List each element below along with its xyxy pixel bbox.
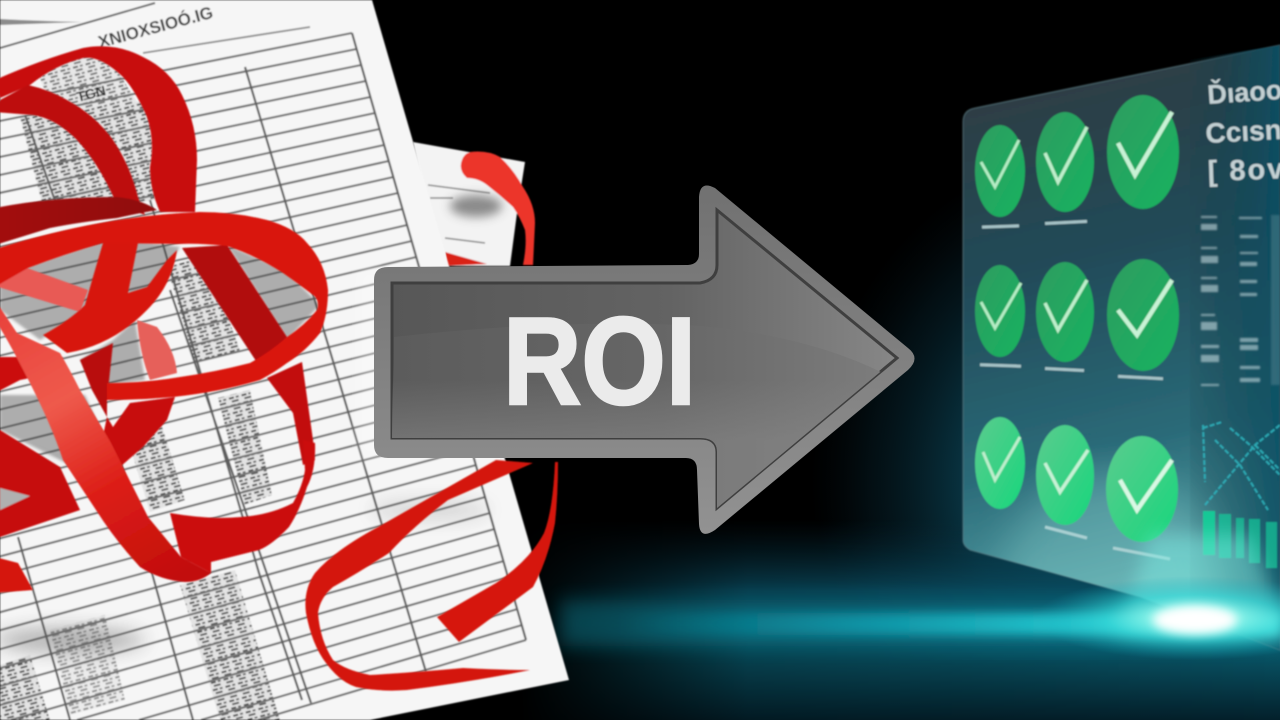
header text: XNIOXSIOÓ.IG [96,3,215,52]
back paper sheet [413,142,535,266]
pale centre band [137,320,177,380]
panel line chart [1203,422,1280,510]
light beam above the burst [1120,535,1280,630]
ROI label: ROI [503,293,696,431]
dense number columns [0,50,280,720]
paper shadow smudge [450,195,502,217]
front bright band [0,300,211,582]
lower left band [0,427,80,537]
top loop [0,46,197,212]
form label text: TGN [75,82,107,105]
floor light streak [560,535,1280,660]
red tape ribbon [0,46,558,691]
bottom left fragment [0,557,33,593]
header rule lines [143,27,310,53]
hanging ribbon tail [437,462,558,642]
table row lines [0,33,526,720]
top-left under sheet edges [0,19,82,25]
big loop [0,212,328,400]
right cross band [182,245,287,364]
check row 1 [975,95,1179,229]
panel right tint [1190,45,1280,650]
ROI arrow [360,185,914,534]
dark crossing band [0,197,157,245]
soft paper shadows [0,494,486,663]
light burst [1035,576,1280,660]
centre dark band [80,343,113,417]
check row 2 [975,259,1179,380]
grey shadow windows inside ribbon loops [0,241,320,480]
under loop band [100,397,175,473]
dashboard panel [963,45,1280,710]
back sheet ribbon fragment [445,252,487,266]
arrow bevel [374,185,914,534]
descending band [0,85,145,215]
lower left thin band [0,357,63,393]
lower right loop [170,440,315,573]
grey gap in lower left band [0,488,30,510]
table column lines [18,33,526,720]
background [545,232,1280,720]
check row 3 [975,417,1178,559]
main spreadsheet paper [0,0,569,720]
panel heading text [1205,74,1280,188]
back sheet ribbon [461,152,535,265]
mid band [43,243,177,353]
arrow gloss lower half [392,370,880,508]
panel glow rising from the light [994,460,1216,594]
panel bar chart [1203,511,1277,568]
panel small data columns [1201,215,1280,386]
long trailing ribbon [305,460,533,691]
pale left band [0,268,88,312]
arrow soft halo [360,268,380,458]
arrow inner face [392,210,897,508]
right loop descending band [267,362,315,465]
